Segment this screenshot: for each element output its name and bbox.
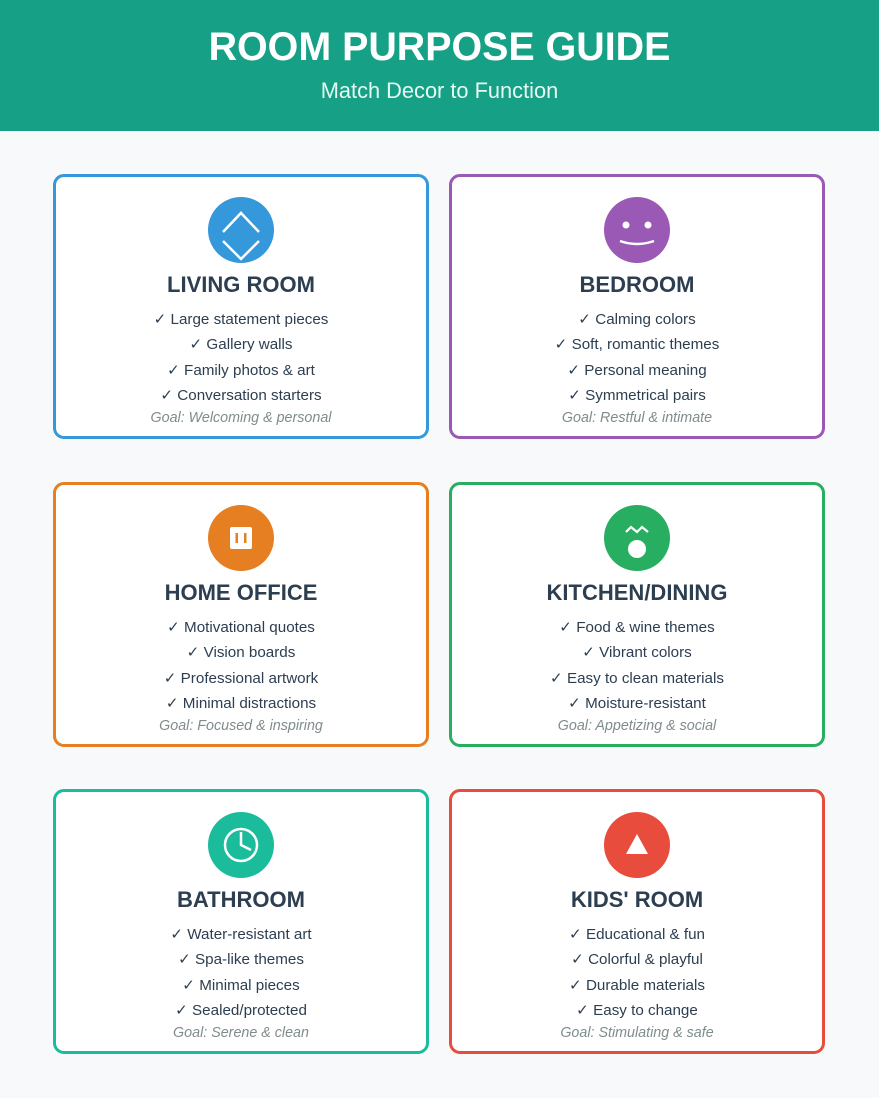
- goal: Goal: Restful & intimate: [562, 410, 712, 426]
- list: ✓ Durable materials: [569, 977, 705, 994]
- panel: bathroom: [53, 789, 429, 1054]
- goal: Goal: Appetizing & social: [558, 718, 716, 734]
- list: [154, 311, 328, 404]
- list: ✓ Educational & fun: [569, 926, 705, 943]
- list: ✓ Water-resistant art: [170, 926, 312, 943]
- icon: triangle: [604, 812, 670, 878]
- list: ✓ Professional artwork: [164, 670, 318, 687]
- list: [164, 619, 318, 712]
- list: ✓ Gallery walls: [189, 336, 293, 353]
- panel: bedroom: [449, 174, 825, 439]
- list: ✓ Symmetrical pairs: [568, 387, 706, 404]
- list: ✓ Minimal pieces: [182, 977, 300, 994]
- heading: KITCHEN/DINING: [547, 580, 727, 605]
- icon: outlet: [208, 505, 274, 571]
- list: ✓ Colorful & playful: [571, 951, 703, 968]
- list: ✓ Easy to clean materials: [550, 670, 724, 687]
- list: ✓ Spa-like themes: [178, 951, 304, 968]
- list: ✓ Sealed/protected: [175, 1002, 307, 1019]
- list: ✓ Conversation starters: [160, 387, 322, 404]
- list: ✓ Calming colors: [578, 311, 696, 328]
- list: ✓ Family photos & art: [167, 362, 315, 379]
- title: ROOM PURPOSE GUIDE: [209, 25, 670, 69]
- list: ✓ Vision boards: [187, 644, 295, 661]
- heading: BATHROOM: [177, 887, 305, 912]
- heading: KIDS' ROOM: [571, 887, 703, 912]
- list: ✓ Food & wine themes: [559, 619, 715, 636]
- icon: clock: [208, 812, 274, 878]
- list: [550, 619, 724, 712]
- goal: Goal: Welcoming & personal: [151, 410, 331, 426]
- list: ✓ Moisture-resistant: [568, 695, 706, 712]
- heading: LIVING ROOM: [167, 272, 315, 297]
- list: [555, 311, 719, 404]
- list: ✓ Easy to change: [576, 1002, 698, 1019]
- goal: Goal: Stimulating & safe: [560, 1025, 714, 1041]
- list: ✓ Vibrant colors: [582, 644, 692, 661]
- heading: BEDROOM: [580, 272, 694, 297]
- subtitle: Match Decor to Function: [321, 78, 558, 103]
- panel: home office: [53, 482, 429, 747]
- header: [0, 0, 879, 131]
- list: ✓ Motivational quotes: [167, 619, 315, 636]
- goal: Goal: Focused & inspiring: [159, 718, 323, 734]
- panel: kitchen: [449, 482, 825, 747]
- goal: Goal: Serene & clean: [173, 1025, 309, 1041]
- heading: HOME OFFICE: [165, 580, 317, 605]
- list: ✓ Personal meaning: [567, 362, 707, 379]
- icon: steaming dish: [604, 505, 670, 571]
- list: ✓ Large statement pieces: [154, 311, 328, 328]
- list: [170, 926, 312, 1019]
- list: ✓ Soft, romantic themes: [555, 336, 719, 353]
- list: [569, 926, 705, 1019]
- icon: chevrons: [208, 197, 274, 263]
- panel: living room: [53, 174, 429, 439]
- list: ✓ Minimal distractions: [166, 695, 316, 712]
- panel: kids room: [449, 789, 825, 1054]
- icon: smiley: [604, 197, 670, 263]
